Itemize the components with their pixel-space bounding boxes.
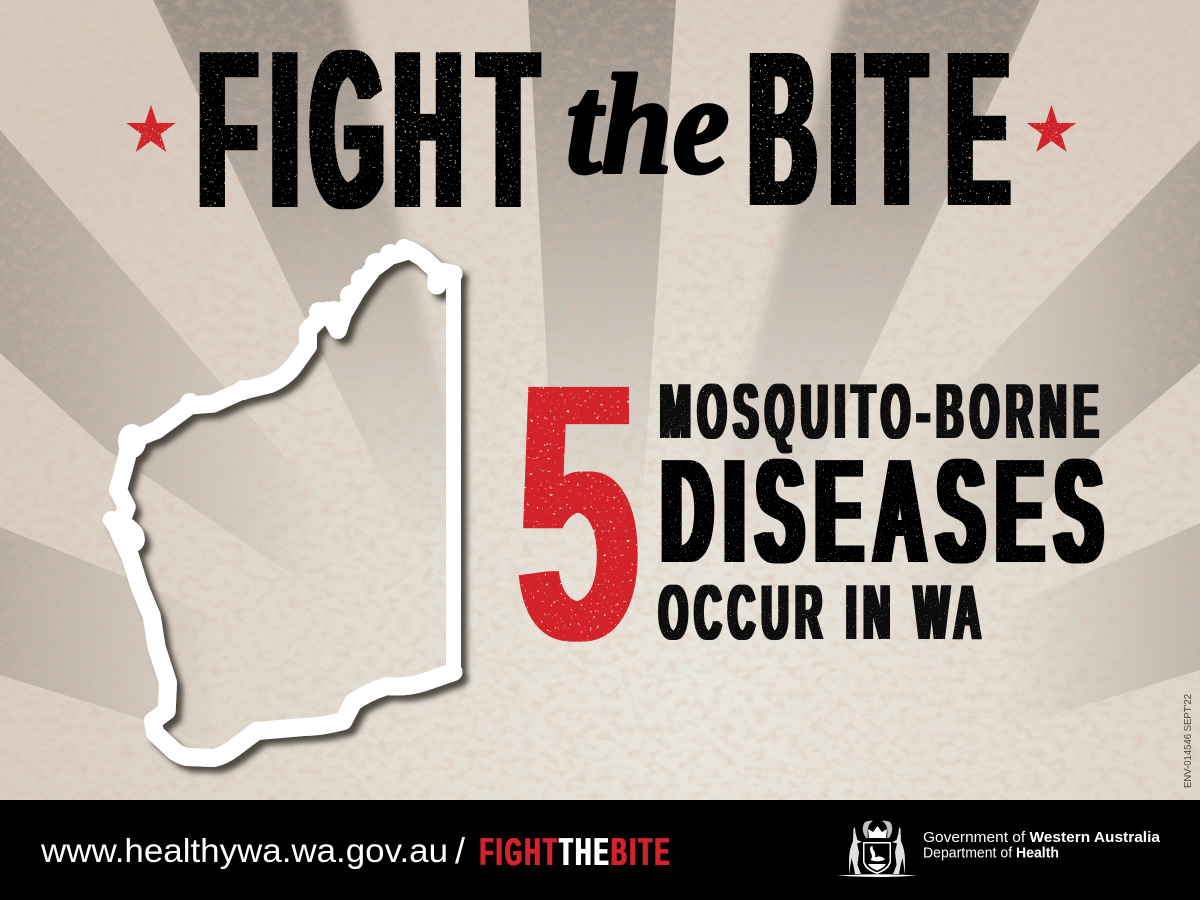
icon: left red star xyxy=(126,105,176,152)
map: Western Australia outline xyxy=(104,239,454,758)
map detail: Shark Bay blob xyxy=(104,513,143,550)
swan xyxy=(870,846,885,861)
crown xyxy=(868,826,887,838)
left kangaroo xyxy=(849,827,862,874)
map detail: North West Cape blob xyxy=(118,424,146,458)
crest base xyxy=(837,874,917,877)
ray: top centre xyxy=(528,0,676,540)
print code: ENV-014546 SEPT'22 xyxy=(1182,694,1194,788)
slash: / xyxy=(455,830,465,871)
text line: DISEASES: DISEASES xyxy=(662,428,1102,594)
shield outline xyxy=(863,842,891,874)
title word: FIGHT: FIGHT xyxy=(200,4,536,255)
map detail: Kimberley coast bumps xyxy=(180,239,413,413)
ray: lower left xyxy=(0,527,220,748)
line: Government of Western Australia: Government of Western Australia xyxy=(923,830,1161,846)
ray: upper right xyxy=(900,140,1200,650)
government text xyxy=(923,830,1161,862)
text line: OCCUR IN WA: OCCUR IN WA xyxy=(659,569,980,656)
ray: lower right xyxy=(1000,523,1200,732)
website url: www.healthywa.wa.gov.au xyxy=(40,832,448,869)
hashtag: FIGHTTHEBITE: FIGHTTHEBITE xyxy=(480,830,669,874)
icon: right red star xyxy=(1027,105,1076,152)
title: FIGHT the BITE xyxy=(200,4,1008,255)
ray: top right xyxy=(732,0,1040,490)
text block: 5 mosquito-borne diseases occur in WA xyxy=(659,368,1102,656)
right kangaroo xyxy=(892,827,905,874)
text line: MOSQUITO-BORNE: MOSQUITO-BORNE xyxy=(660,368,1098,455)
title word: BITE: BITE xyxy=(750,5,1008,252)
title word: the: the xyxy=(566,47,729,204)
icon: WA coat of arms xyxy=(837,821,917,877)
ray: top left xyxy=(153,0,446,490)
numeral: 5: 5 xyxy=(517,308,639,716)
footer band xyxy=(0,800,1200,900)
shield base xyxy=(868,864,886,870)
line: Department of Health: Department of Health xyxy=(923,846,1059,862)
wreath xyxy=(863,821,892,838)
ray: upper left xyxy=(0,130,330,600)
